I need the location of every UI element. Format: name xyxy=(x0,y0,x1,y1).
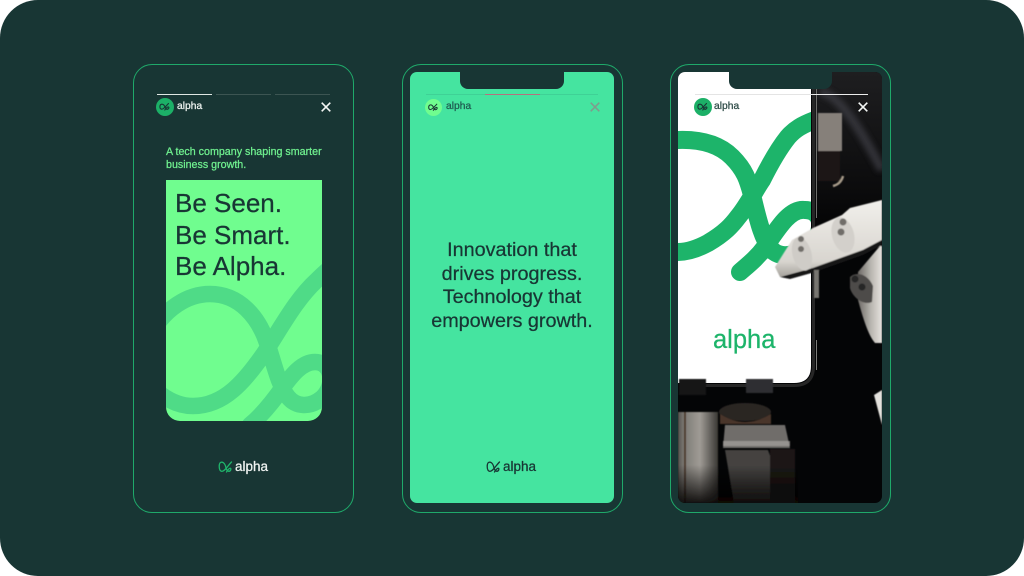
icon: phone 1 close xyxy=(321,102,331,112)
black pads xyxy=(679,379,706,395)
round knob xyxy=(719,403,771,421)
post under finger xyxy=(814,270,819,298)
panel: phone 2 outline xyxy=(402,64,623,513)
phone 3 notch xyxy=(729,72,832,89)
panel: phone 3 outline xyxy=(670,64,891,513)
footer brand name: alpha xyxy=(235,458,268,474)
card headline: Be Alpha. xyxy=(175,251,286,281)
panel: phone 1 green card xyxy=(166,180,322,421)
lower right sliver xyxy=(874,390,882,425)
phone 3 brand name: alpha xyxy=(714,100,739,112)
icon: footer logo mark xyxy=(486,461,500,473)
phone 2 notch xyxy=(460,72,564,89)
phone 2 footer logo xyxy=(486,458,536,474)
icon: footer logo mark xyxy=(218,461,232,473)
phone frame edge xyxy=(706,89,815,387)
phone 1 brand name: alpha xyxy=(177,100,202,112)
panel: phone 3 screen with robot scene xyxy=(678,72,882,503)
backdrop cable xyxy=(820,92,882,170)
icon: phone 3 logo badge xyxy=(694,98,712,116)
card swoosh graphic xyxy=(166,264,322,421)
phone 2 main message: Technology that xyxy=(443,286,581,308)
bottom shadow xyxy=(678,465,798,503)
phone 3 progress bar xyxy=(695,94,868,95)
phone 2 main message: Innovation that xyxy=(447,239,577,261)
phone 2 brand name: alpha xyxy=(446,100,471,112)
phone 3 large brand name: alpha xyxy=(713,326,775,354)
footer brand name: alpha xyxy=(503,458,536,474)
panel: phone 1 outline xyxy=(133,64,354,513)
lower block xyxy=(723,425,790,448)
phone 2 progress bar xyxy=(426,94,598,95)
phone 2 main message: empowers growth. xyxy=(431,310,593,332)
dark backdrop xyxy=(678,72,882,503)
panel: phone 2 screen xyxy=(410,72,614,503)
left cylinder xyxy=(678,412,718,503)
phone 1 footer logo xyxy=(218,458,268,474)
robot finger xyxy=(775,200,882,277)
card headline xyxy=(175,188,291,281)
card headline: Be Smart. xyxy=(175,220,291,250)
icon: phone 1 logo badge xyxy=(156,98,174,116)
card headline: Be Seen. xyxy=(175,188,282,218)
upper mechanism xyxy=(818,113,842,151)
icon: phone 3 close xyxy=(858,102,868,112)
white phone screen xyxy=(678,72,811,383)
icon: phone 2 close xyxy=(590,102,600,112)
phone 2 main message: drives progress. xyxy=(442,263,582,285)
phone 2 main message xyxy=(431,239,593,332)
phone 1 tagline: A tech company shaping smarter xyxy=(166,146,322,158)
phone 1 tagline: business growth. xyxy=(166,158,246,170)
phone 1 tagline xyxy=(166,146,322,171)
icon: phone 2 logo badge xyxy=(425,99,442,116)
swoosh xyxy=(665,120,820,272)
panel: phone 1 progress bar xyxy=(157,94,330,95)
robot arm xyxy=(858,246,882,343)
